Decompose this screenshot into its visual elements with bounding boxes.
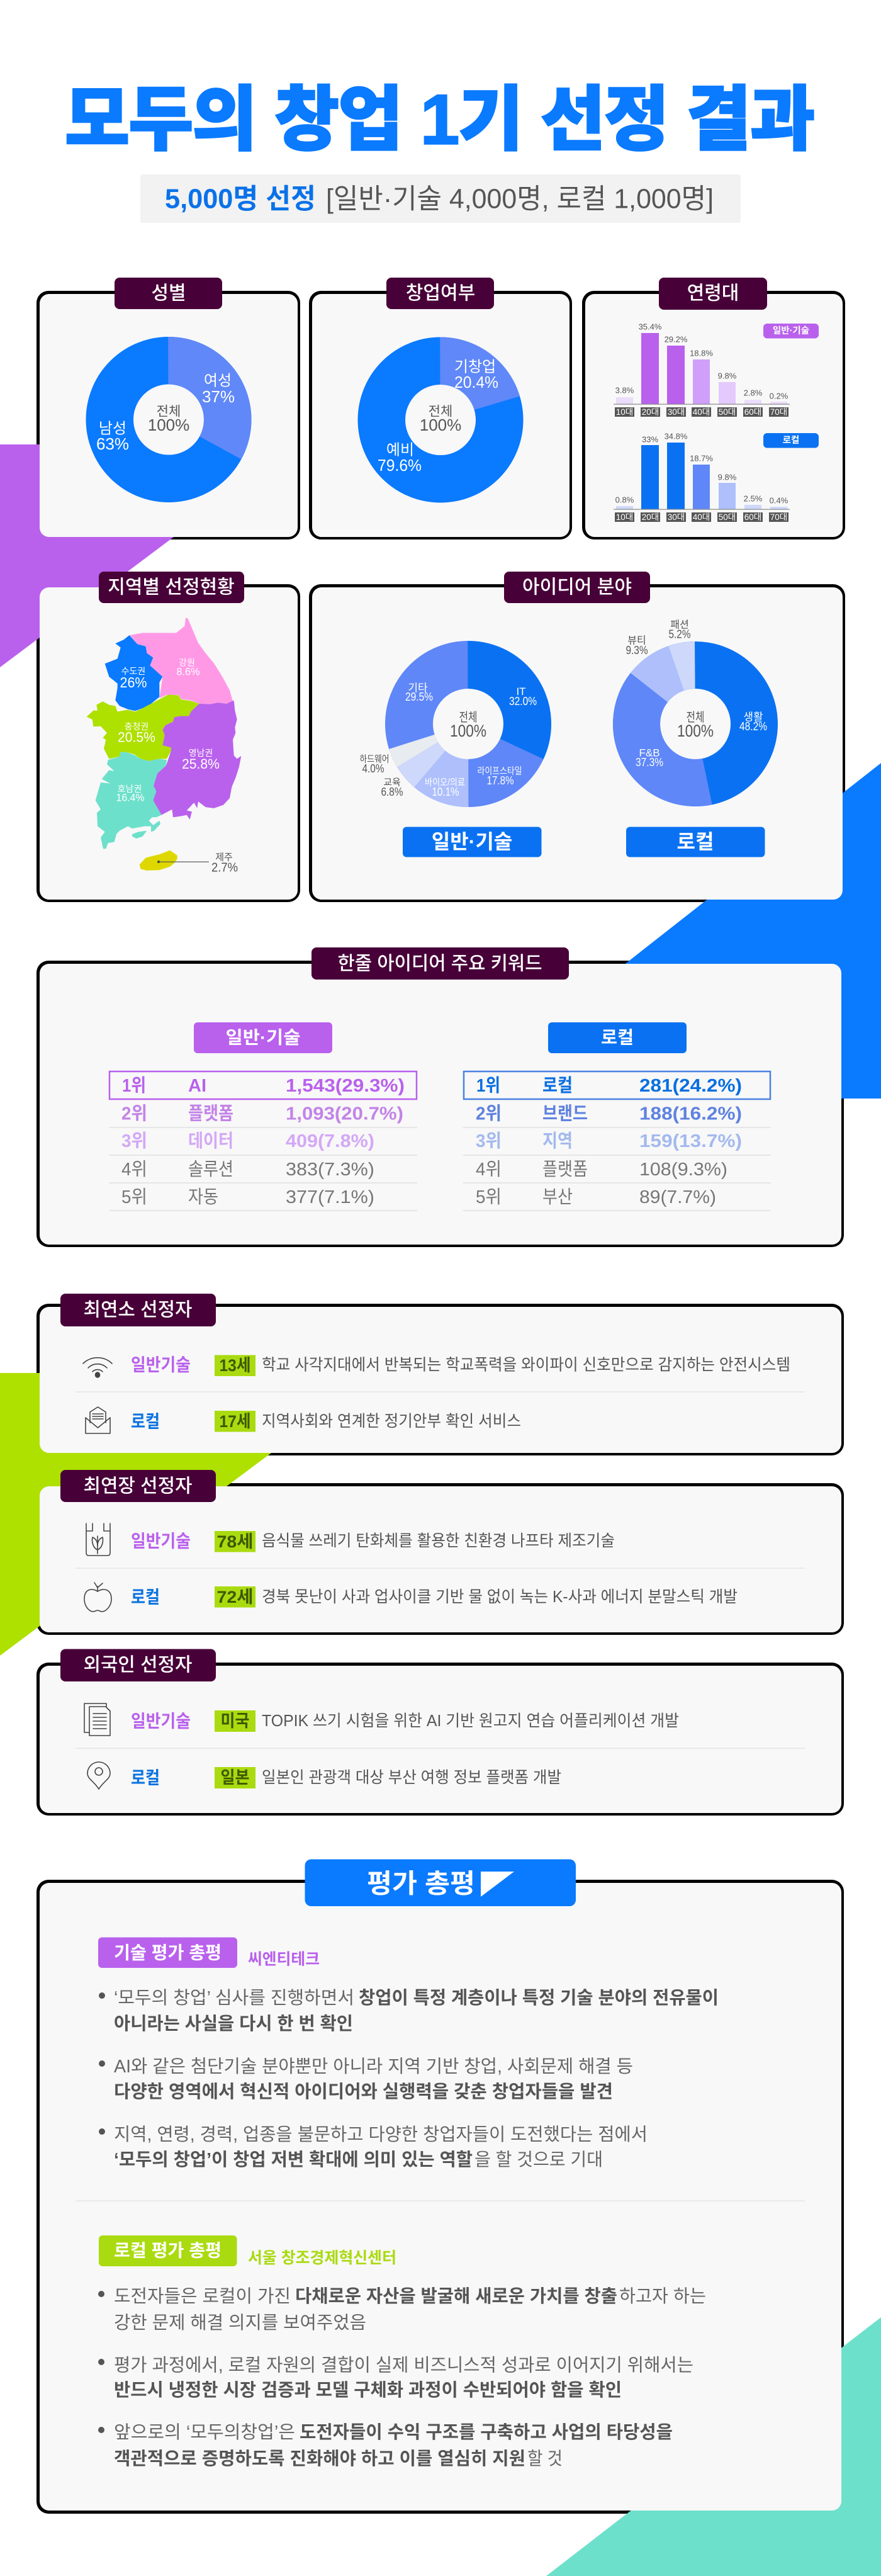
row: foreign general tech: TOPIK 쓰기 시험을 위한 AI 기반 원고지 연습 어플리케이션 개발 — [262, 1712, 679, 1730]
subtitle box — [140, 174, 741, 223]
heading: age groups: 연령대 — [687, 283, 739, 303]
row: oldest local: 72세 — [216, 1588, 253, 1607]
bar chart: general tech by age: 50대 — [719, 407, 736, 417]
donut chart: general tech fields: 32.0% — [509, 695, 537, 708]
keyword table: general tech: 383(7.3%) — [286, 1160, 374, 1180]
donut chart: local fields: 5.2% — [668, 628, 691, 641]
panel: idea fields — [309, 572, 845, 902]
local evaluation block: 할 것 — [527, 2449, 563, 2469]
tech evaluation block: 다양한 영역에서 혁신적 아이디어와 실행력을 갖춘 창업자들을 발견 — [114, 2082, 613, 2102]
heading: idea fields — [504, 572, 650, 603]
donut chart: startup status: 예비 — [386, 442, 414, 458]
icon: wifi — [83, 1358, 112, 1377]
donut chart: general tech fields: 전체 — [459, 710, 477, 725]
keyword table: general tech: 1,093(20.7%) — [286, 1104, 403, 1124]
bar chart: local by age: 20대 — [642, 512, 659, 522]
tech evaluation block: 창업이 특정 계층이나 특정 기술 분야의 전유물이 — [359, 1988, 719, 2008]
map of Korea: 충청권 — [125, 721, 149, 732]
local evaluation block: 객관적으로 증명하도록 진화해야 하고 이를 열심히 지원 — [114, 2449, 525, 2469]
keyword table: local: 108(9.3%) — [639, 1160, 727, 1180]
row: foreign local: 일본인 관광객 대상 부산 여행 정보 플랫폼 개발 — [262, 1769, 561, 1787]
row: youngest local: 17세 — [219, 1412, 250, 1431]
donut chart: general tech fields: 100% — [450, 721, 486, 740]
keyword table: general tech: 플랫폼 — [188, 1103, 233, 1124]
row: oldest general tech: 음식물 쓰레기 탄화체를 활용한 친환경 나프타 제조기술 — [262, 1532, 615, 1550]
donut chart: startup status — [378, 359, 500, 479]
row: youngest local — [131, 1411, 521, 1432]
row: oldest general tech: 78세 — [216, 1532, 253, 1551]
donut chart: gender: 여성 — [204, 373, 232, 389]
tech evaluation block: ‘모두의 창업’이 창업 저변 확대에 의미 있는 역할 — [114, 2150, 473, 2170]
donut chart: local fields: 패션 — [670, 619, 689, 631]
bar chart: general tech by age: 9.8% — [718, 371, 737, 380]
donut chart: local fields: 생활 — [743, 711, 763, 723]
donut chart: general tech fields: 4.0% — [362, 762, 384, 775]
bar chart: general tech by age: 0.2% — [770, 392, 788, 400]
tech evaluation block: 기술 평가 총평 — [114, 1943, 222, 1963]
local evaluation block: 다채로운 자산을 발굴해 새로운 가치를 창출 — [295, 2286, 617, 2307]
bar chart: general tech by age: 29.2% — [665, 335, 688, 344]
map of Korea: 16.4% — [116, 792, 145, 803]
bar chart: local by age: 0.8% — [615, 495, 634, 505]
keyword table: local: 188(16.2%) — [639, 1104, 742, 1124]
heading: keywords: 한줄 아이디어 주요 키워드 — [337, 953, 542, 974]
row: youngest general tech: 13세 — [219, 1356, 250, 1375]
label: local: 로컬 — [677, 830, 714, 853]
icon: envelope — [86, 1407, 110, 1433]
donut chart: general tech fields: 17.8% — [487, 774, 513, 787]
bar chart: general tech by age: 60대 — [744, 407, 761, 417]
heading: startup status: 창업여부 — [406, 283, 475, 303]
keyword table: general tech: 3위 — [121, 1131, 147, 1151]
bar chart: local by age: 9.8% — [718, 472, 737, 482]
keyword table: local: 5위 — [476, 1187, 502, 1207]
keyword table: local: 2위 — [476, 1103, 502, 1124]
row: oldest general tech — [131, 1531, 615, 1552]
heading: evaluation summary: 평가 총평 — [367, 1868, 475, 1899]
row: youngest local: 로컬 — [131, 1411, 160, 1432]
donut chart: gender — [96, 361, 235, 478]
bar chart: general tech by age: 20대 — [642, 407, 659, 417]
panel: foreign selectees — [36, 1649, 844, 1816]
row: oldest local: 경북 못난이 사과 업사이클 기반 물 없이 녹는 K-사과 에너지 분말스틱 개발 — [262, 1588, 738, 1606]
donut chart: general tech fields: 바이오/의료 — [425, 777, 465, 788]
bar chart: general tech by age: 18.8% — [690, 349, 713, 358]
donut chart: gender: 63% — [96, 434, 129, 453]
heading: foreign: 외국인 선정자 — [83, 1654, 193, 1676]
bar chart: local by age: 2.5% — [744, 494, 763, 504]
keyword table: local — [463, 1022, 771, 1211]
map of Korea: 20.5% — [118, 729, 155, 745]
donut chart: startup status: 20.4% — [454, 373, 498, 392]
keyword table: general tech: 일반·기술 — [225, 1027, 301, 1048]
bar chart: general tech by age — [614, 322, 819, 417]
bar chart: local by age: 18.7% — [690, 453, 713, 463]
bar chart: general tech by age: 35.4% — [639, 322, 662, 331]
map of Korea: 수도권 — [121, 666, 145, 676]
heading: oldest — [60, 1470, 216, 1502]
row: foreign local — [131, 1767, 561, 1788]
keyword table: general tech: 409(7.8%) — [286, 1131, 374, 1151]
keyword table: local: 1위 — [476, 1075, 500, 1096]
tech evaluation block: 씨엔티테크 — [248, 1950, 320, 1968]
keyword table: local: 부산 — [542, 1187, 573, 1207]
donut chart: local fields: 37.3% — [636, 756, 663, 769]
panel: evaluation summary — [36, 1860, 844, 2514]
icon: documents — [84, 1703, 110, 1736]
donut chart: startup status: 79.6% — [378, 456, 422, 475]
keyword table: general tech: 자동 — [188, 1187, 218, 1207]
map of Korea: 26% — [120, 674, 147, 691]
row: foreign general tech: 일반기술 — [131, 1711, 191, 1731]
donut chart: gender: 100% — [148, 415, 189, 434]
row: foreign local: 일본 — [220, 1768, 249, 1787]
heading: age groups — [659, 278, 767, 310]
donut chart: local fields: 48.2% — [739, 720, 767, 733]
keyword table: general tech: 1위 — [122, 1075, 146, 1096]
local evaluation block: 도전자들은 로컬이 가진 — [114, 2286, 291, 2307]
donut chart: local fields — [626, 619, 767, 783]
bar chart: local by age: 70대 — [770, 512, 787, 522]
keyword table: local: 89(7.7%) — [639, 1187, 716, 1207]
donut chart: general tech fields: 10.1% — [432, 786, 459, 798]
row: oldest local — [131, 1586, 738, 1608]
heading: oldest: 최연장 선정자 — [83, 1476, 193, 1497]
map of Korea: 25.8% — [182, 756, 220, 772]
heading: youngest — [60, 1294, 216, 1326]
label: local — [626, 827, 765, 857]
row: youngest general tech: 일반기술 — [131, 1355, 191, 1375]
local evaluation block: 강한 문제 해결 의지를 보여주었음 — [114, 2313, 366, 2333]
bar chart: local by age: 50대 — [719, 512, 736, 522]
keyword table: local: 로컬 — [542, 1075, 573, 1096]
heading: regional map — [99, 572, 244, 603]
bar chart: local by age: 로컬 — [783, 435, 799, 446]
tech evaluation block: 을 할 것으로 기대 — [474, 2150, 603, 2170]
title: 모두의 창업 1기 선정 결과 — [65, 81, 815, 159]
keyword table: local: 159(13.7%) — [639, 1131, 742, 1151]
bar chart: local by age: 0.4% — [770, 496, 788, 505]
donut chart: local fields: F&B — [639, 747, 660, 759]
keyword table: general tech: 1,543(29.3%) — [286, 1076, 405, 1096]
tech evaluation block — [98, 1938, 719, 2170]
keyword table: local: 브랜드 — [542, 1103, 588, 1124]
row: foreign general tech: 미국 — [220, 1712, 249, 1731]
bar chart: general tech by age: 2.8% — [744, 388, 763, 398]
heading: youngest: 최연소 선정자 — [83, 1299, 193, 1321]
keyword table: general tech: 5위 — [121, 1187, 147, 1207]
donut chart: local fields: 뷰티 — [627, 635, 646, 646]
heading: gender — [115, 278, 222, 309]
map of Korea — [87, 618, 241, 875]
donut chart: general tech fields: 6.8% — [381, 786, 403, 798]
subtitle box: [일반·기술 4,000명, 로컬 1,000명] — [326, 184, 714, 214]
panel: startup status — [309, 278, 572, 539]
local evaluation block: 서울 창조경제혁신센터 — [248, 2249, 396, 2267]
keyword table: local: 281(24.2%) — [639, 1076, 742, 1096]
heading: evaluation summary — [305, 1860, 576, 1906]
row: youngest general tech: 학교 사각지대에서 반복되는 학교폭력을 와이파이 신호만으로 감지하는 안전시스템 — [262, 1356, 790, 1374]
donut chart: startup status: 기창업 — [454, 359, 496, 375]
row: foreign general tech — [131, 1710, 679, 1732]
donut chart: general tech fields: 기타 — [408, 682, 428, 694]
keyword table: local: 4위 — [476, 1159, 502, 1180]
bar chart: general tech by age: 10대 — [616, 407, 633, 417]
bar chart: local by age: 33% — [642, 434, 658, 444]
keyword table: general tech: AI — [188, 1076, 206, 1096]
map of Korea: 8.6% — [176, 666, 200, 677]
local evaluation block: 평가 과정에서, 로컬 자원의 결합이 실제 비즈니스적 성과로 이어지기 위해서는 — [114, 2356, 693, 2376]
tech evaluation block: 아니라는 사실을 다시 한 번 확인 — [114, 2014, 353, 2034]
keyword table: general tech: 데이터 — [188, 1131, 233, 1151]
row: youngest general tech — [131, 1355, 790, 1376]
bar chart: general tech by age: 일반·기술 — [773, 325, 809, 336]
row: oldest general tech: 일반기술 — [131, 1531, 191, 1551]
panel: gender — [36, 278, 300, 539]
keyword table: local: 플랫폼 — [542, 1160, 588, 1180]
bar chart: local by age: 34.8% — [665, 432, 688, 441]
keyword table: local: 지역 — [542, 1131, 573, 1151]
bar chart: general tech by age: 30대 — [668, 407, 685, 417]
bar chart: local by age: 60대 — [744, 512, 761, 522]
donut chart: startup status: 100% — [420, 415, 461, 434]
bar chart: local by age: 10대 — [616, 512, 633, 522]
heading: keywords — [311, 947, 569, 980]
keyword table: local: 3위 — [476, 1131, 502, 1151]
tech evaluation block: AI와 같은 첨단기술 분야뿐만 아니라 지역 기반 창업, 사회문제 해결 등 — [114, 2057, 633, 2077]
bar chart: local by age: 30대 — [668, 512, 685, 522]
map of Korea: 영남권 — [189, 748, 213, 758]
subtitle box: 5,000명 선정 — [165, 184, 316, 214]
map of Korea: 강원 — [179, 657, 195, 667]
donut chart: general tech fields — [360, 665, 537, 798]
heading: startup status — [386, 278, 494, 309]
bar chart: general tech by age: 3.8% — [615, 385, 634, 395]
donut chart: startup status: 전체 — [429, 404, 452, 419]
bar chart: general tech by age: 40대 — [693, 407, 710, 417]
keyword table: general tech: 솔루션 — [188, 1160, 233, 1180]
row: foreign local: 로컬 — [131, 1768, 160, 1788]
icon: map pin — [87, 1762, 110, 1789]
row: oldest local: 로컬 — [131, 1588, 160, 1607]
keyword table: general tech: 2위 — [121, 1103, 147, 1124]
local evaluation block: 하고자 하는 — [619, 2286, 706, 2307]
local evaluation block — [98, 2235, 706, 2469]
donut chart: general tech fields: 교육 — [383, 777, 401, 788]
label: general tech: 일반·기술 — [432, 830, 512, 853]
row: youngest local: 지역사회와 연계한 정기안부 확인 서비스 — [262, 1413, 521, 1430]
tech evaluation block: ‘모두의 창업’ 심사를 진행하면서 — [114, 1988, 354, 2008]
donut chart: general tech fields: 하드웨어 — [360, 754, 389, 764]
map of Korea: 제주 — [215, 852, 233, 862]
local evaluation block: 앞으로의 ‘모두의창업’은 — [114, 2422, 295, 2443]
donut chart: gender: 37% — [202, 387, 235, 406]
bar chart: local by age — [614, 432, 819, 522]
panel: youngest selectees — [36, 1294, 844, 1455]
donut chart: general tech fields: 29.5% — [405, 691, 433, 703]
local evaluation block: 로컬 평가 총평 — [114, 2241, 222, 2260]
heading: foreign — [60, 1649, 216, 1681]
panel: regional map — [36, 572, 300, 902]
donut chart: local fields: 9.3% — [626, 644, 648, 657]
heading: regional map: 지역별 선정현황 — [108, 577, 235, 598]
keyword table: local: 로컬 — [601, 1027, 634, 1048]
donut chart: gender: 전체 — [157, 404, 181, 419]
panel: age groups — [582, 278, 845, 539]
map of Korea: 2.7% — [211, 861, 238, 875]
panel: oldest selectees — [38, 1470, 844, 1635]
donut chart: gender: 남성 — [99, 421, 126, 437]
heading: gender: 성별 — [151, 283, 186, 303]
donut chart: general tech fields: 라이프스타일 — [477, 765, 522, 777]
bar chart: general tech by age: 70대 — [770, 407, 787, 417]
donut chart: general tech fields: IT — [516, 686, 526, 698]
icon: apple — [84, 1583, 111, 1612]
donut chart: local fields: 전체 — [686, 710, 705, 725]
panel: one-line idea keywords — [36, 947, 844, 1247]
keyword table: general tech — [109, 1022, 417, 1211]
map of Korea: 호남권 — [118, 784, 142, 794]
local evaluation block: 도전자들이 수익 구조를 구축하고 사업의 타당성을 — [300, 2422, 673, 2443]
donut chart: local fields: 100% — [677, 721, 714, 740]
keyword table: general tech: 4위 — [121, 1159, 147, 1180]
keyword table: general tech: 377(7.1%) — [286, 1187, 374, 1207]
local evaluation block: 반드시 냉정한 시장 검증과 모델 구체화 과정이 수반되어야 함을 확인 — [114, 2380, 622, 2400]
icon: bag with leaf — [86, 1523, 110, 1556]
label: general tech — [403, 827, 541, 857]
heading: idea fields: 아이디어 분야 — [522, 577, 632, 598]
bar chart: local by age: 40대 — [693, 512, 710, 522]
tech evaluation block: 지역, 연령, 경력, 업종을 불문하고 다양한 창업자들이 도전했다는 점에서 — [114, 2125, 648, 2145]
